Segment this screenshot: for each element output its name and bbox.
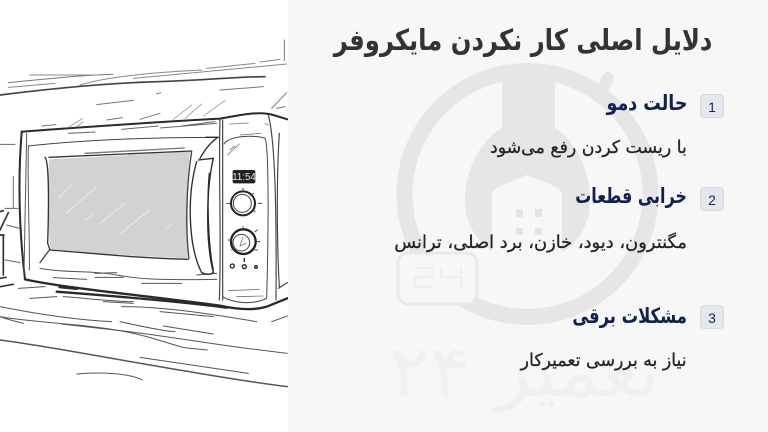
number badge 3: 3 — [708, 310, 716, 326]
panel: text background — [288, 0, 768, 432]
sketch: microwave display: 11:54 — [232, 172, 256, 183]
watermark: wrench — [465, 66, 590, 256]
heading 3: مشکلات برقی — [572, 304, 687, 328]
sketch: wall and shelf lines — [0, 40, 287, 287]
heading 2: خرابی قطعات — [575, 184, 687, 208]
illustration: microwave sketch — [0, 40, 288, 388]
watermark: 24 badge — [398, 253, 477, 304]
body text 1: با ریست کردن رفع می‌شود — [490, 138, 687, 158]
watermark: house windows — [516, 209, 542, 235]
watermark: wordmark: تعمیر ۲۴ — [389, 329, 660, 413]
sketch: counter lines — [0, 287, 287, 387]
body text 2: مگنترون، دیود، خازن، برد اصلی، ترانس — [394, 233, 687, 253]
title: دلایل اصلی کار نکردن مایکروفر — [333, 23, 712, 57]
number badge 2 — [700, 187, 724, 211]
watermark: ring handle tick — [602, 78, 608, 92]
sketch: microwave window — [48, 152, 190, 258]
body text 3: نیاز به بررسی تعمیرکار — [521, 351, 687, 371]
number badge 3 — [700, 305, 724, 329]
number badge 1: 1 — [708, 99, 716, 115]
sketch: lower knob — [228, 227, 260, 254]
sketch: control buttons — [230, 258, 257, 269]
sketch: microwave body — [19, 113, 287, 309]
number badge 2: 2 — [708, 192, 716, 208]
watermark: house — [492, 175, 562, 262]
sketch: upper knob — [227, 188, 262, 215]
heading 1: حالت دمو — [606, 91, 687, 115]
watermark: ring — [404, 71, 650, 317]
number badge 1 — [700, 94, 724, 118]
